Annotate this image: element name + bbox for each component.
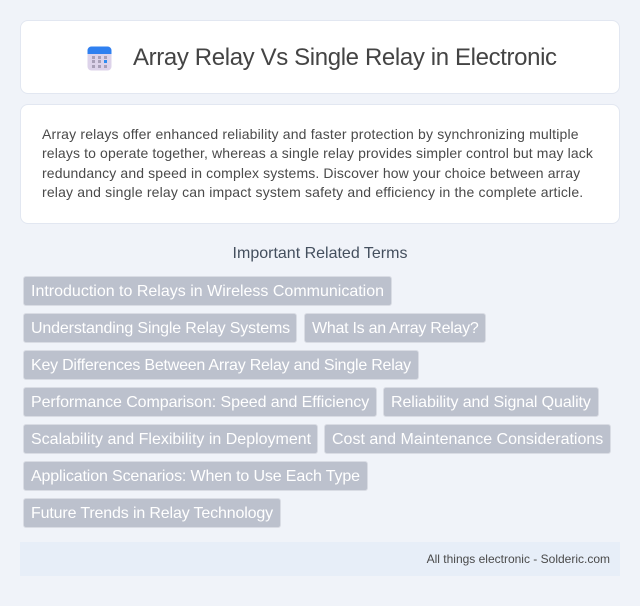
tag — [383, 387, 599, 417]
tag — [23, 350, 419, 380]
heading: important related terms: Important Related Terms — [233, 245, 407, 262]
panel: description card — [20, 104, 620, 224]
tag — [23, 276, 392, 306]
text block: description — [42, 126, 593, 200]
tag: Future Trends in Relay Technology — [31, 505, 273, 522]
panel: related term tags — [23, 276, 611, 528]
footer bar — [20, 542, 620, 576]
tag: Scalability and Flexibility in Deployment — [31, 431, 311, 448]
text block: description: relay and single relay can impact system safety and efficiency in the complete article. — [42, 184, 583, 200]
tag: Performance Comparison: Speed and Efficiency — [31, 394, 369, 411]
tag: Introduction to Relays in Wireless Communication — [31, 283, 384, 300]
tag — [304, 313, 486, 343]
panel: title card — [20, 20, 620, 94]
text block: description: relays to operate together, whereas a single relay provides simpler control but may lack — [42, 145, 593, 161]
tag — [23, 424, 318, 454]
title: Array Relay Vs Single Relay in Electronic — [133, 44, 557, 71]
icon: calendar — [88, 46, 112, 70]
tag: Application Scenarios: When to Use Each Type — [31, 468, 360, 485]
text block: description: Array relays offer enhanced reliability and faster protection by synchronizing multiple — [42, 126, 579, 142]
tag — [324, 424, 611, 454]
tag — [23, 387, 377, 417]
tag: Reliability and Signal Quality — [391, 394, 591, 411]
tag: Understanding Single Relay Systems — [31, 320, 290, 337]
text block: description: redundancy and speed in complex systems. Discover how your choice between array — [42, 165, 580, 181]
tag — [23, 498, 281, 528]
tag — [23, 313, 297, 343]
tag: Key Differences Between Array Relay and Single Relay — [31, 357, 411, 374]
tag: What Is an Array Relay? — [312, 320, 479, 337]
tag: Cost and Maintenance Considerations — [332, 431, 603, 448]
footer text: All things electronic - Solderic.com — [427, 552, 610, 566]
tag — [23, 461, 368, 491]
